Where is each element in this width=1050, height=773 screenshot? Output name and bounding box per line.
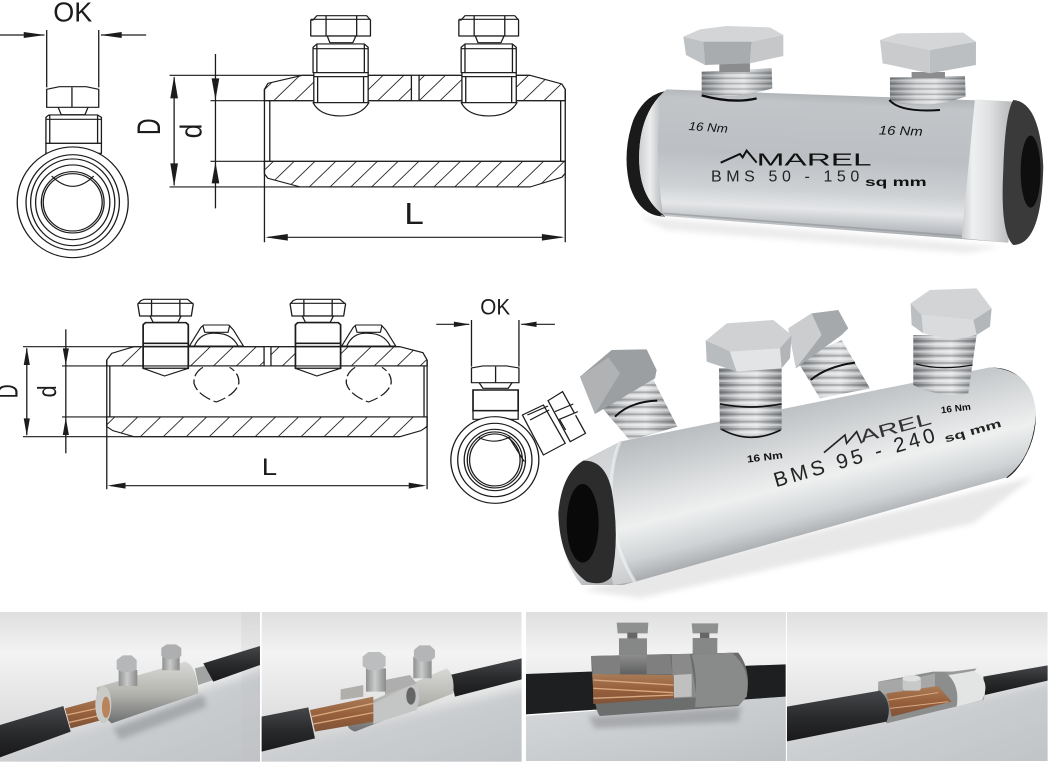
d dimension: d — [33, 385, 62, 397]
copper strands — [593, 674, 692, 704]
connector body — [878, 668, 985, 723]
front rubber seal — [558, 461, 616, 583]
copper strands — [310, 697, 373, 732]
left cable — [262, 707, 315, 752]
diagram: section view of two-bolt connector — [132, 16, 565, 242]
connector body — [95, 662, 198, 723]
connector body — [591, 653, 748, 716]
panel background — [526, 612, 786, 761]
body and dimension lines — [170, 75, 565, 242]
front left bolt — [706, 320, 792, 437]
engraved labels: BMS 95 - 240 — [771, 424, 938, 492]
L dimension: L — [262, 455, 277, 481]
body and dimension lines — [23, 347, 427, 489]
L dimension — [108, 455, 426, 489]
copper strands — [65, 697, 112, 728]
side bolts — [189, 325, 396, 346]
L dimension: L — [404, 196, 424, 230]
engraved labels: 16 Nm — [940, 402, 971, 415]
left bolt — [683, 26, 783, 101]
section hatching — [107, 347, 427, 437]
diagram: end view of four-bolt connector — [436, 296, 586, 503]
end view concentric rings — [17, 147, 128, 258]
angled side bolt — [522, 392, 586, 455]
bolts — [617, 623, 718, 674]
panel background — [0, 612, 260, 762]
engraved labels: AREL — [857, 408, 934, 447]
engraved labels — [688, 119, 927, 189]
photo panel 4: cable fully inserted — [786, 612, 1048, 761]
d dimension: d — [175, 124, 209, 138]
diagram: section view of four-bolt connector — [0, 299, 427, 489]
engraved labels: 16 Nm — [688, 119, 728, 136]
connector barrel — [639, 89, 1013, 243]
right rubber seal — [1003, 100, 1043, 245]
L dimension — [265, 196, 564, 241]
photo panel 3: side cutaway close-up — [526, 612, 786, 761]
right bolt — [880, 33, 976, 110]
right strands and cable — [195, 646, 260, 685]
end view concentric rings — [451, 417, 539, 503]
engraved labels — [746, 402, 1003, 492]
dimension arrows: OK width — [0, 30, 146, 87]
left cable — [787, 691, 889, 741]
section hatching — [264, 75, 565, 187]
engraved labels: sq mm — [943, 418, 1003, 446]
photo panel 2: cutaway with strands inserted — [262, 612, 522, 762]
bolts — [138, 299, 346, 376]
diagram: end view of two-bolt connector — [0, 0, 146, 258]
engraved labels: 16 Nm — [746, 450, 784, 466]
panel background — [262, 612, 522, 762]
engraved labels: 16 Nm — [879, 123, 923, 139]
engraved labels: sq mm — [865, 175, 927, 189]
dashed side-bolt circles — [194, 367, 391, 402]
bolt — [903, 675, 921, 691]
shadow — [583, 477, 1033, 598]
photo panel 1: assembled connector on cable — [0, 612, 260, 762]
right rubber seal — [990, 368, 1036, 478]
d dimension — [175, 54, 219, 208]
front right bolt — [911, 288, 992, 395]
connector shadow — [113, 695, 207, 740]
left rubber seal — [627, 91, 668, 217]
photo: two-bolt connector BMS 50-150 — [627, 26, 1043, 253]
bolts — [117, 644, 181, 686]
connector shadow — [588, 707, 742, 728]
shadow — [640, 217, 1000, 253]
right cable — [983, 665, 1048, 695]
right cable — [450, 658, 522, 697]
dimension arrows: OK width — [436, 320, 555, 367]
cable — [526, 664, 786, 714]
panel background — [787, 612, 1048, 761]
D dimension: D — [132, 118, 167, 135]
engraved labels: MAREL — [757, 149, 872, 169]
rear right bolt — [788, 310, 870, 398]
bolt head and threaded boss — [46, 87, 101, 153]
bolts — [363, 645, 435, 692]
d dimension — [33, 329, 69, 453]
photo: four-bolt connector BMS 95-240 — [558, 288, 1036, 598]
D dimension — [132, 76, 178, 186]
bolt head and boss — [471, 366, 519, 419]
left cable — [0, 706, 71, 757]
engraved labels: BMS 50 - 150 — [711, 169, 859, 186]
label: OK dimension: OK — [480, 296, 510, 320]
connector barrel — [560, 367, 1036, 585]
rear left bolt — [580, 349, 677, 441]
connector body — [341, 668, 454, 732]
D dimension — [0, 347, 30, 436]
copper strands — [887, 686, 952, 717]
bolts — [311, 16, 519, 116]
